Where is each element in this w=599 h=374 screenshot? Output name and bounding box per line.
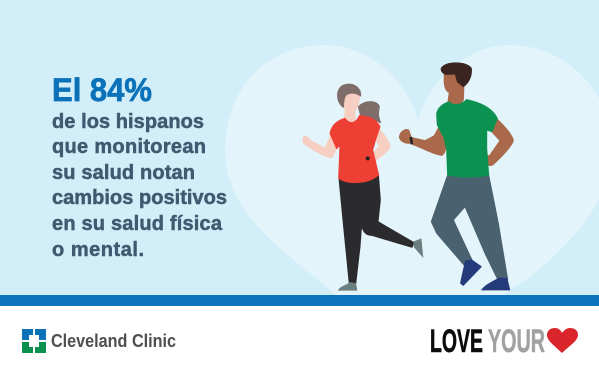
footer panel bbox=[0, 306, 599, 374]
leggings bbox=[339, 174, 414, 284]
ponytail bbox=[358, 102, 381, 123]
body text bbox=[52, 111, 227, 261]
shoes bbox=[460, 259, 482, 286]
watch bbox=[366, 156, 370, 160]
logo: Cleveland Clinic bbox=[22, 329, 176, 353]
logo: Love Your Heart bbox=[430, 323, 578, 359]
shoes bbox=[338, 282, 357, 291]
near arm bbox=[303, 135, 338, 158]
face and neck bbox=[343, 92, 359, 123]
head and neck bbox=[444, 71, 464, 106]
YOUR: YOUR bbox=[488, 323, 545, 359]
wristband bbox=[410, 137, 413, 144]
green shirt bbox=[437, 100, 497, 177]
body text: su salud notan bbox=[52, 162, 195, 184]
icon: red heart bbox=[547, 328, 578, 353]
illustration: man jogging bbox=[399, 63, 513, 290]
body text: que monitorean bbox=[52, 136, 206, 158]
far arm bbox=[358, 127, 390, 165]
body text: en su salud física bbox=[52, 213, 223, 235]
wordmark: Cleveland Clinic bbox=[51, 331, 176, 351]
far arm bbox=[411, 128, 447, 155]
blue divider bar bbox=[0, 295, 599, 306]
near arm bbox=[481, 119, 513, 165]
headline statistic: El 84% bbox=[52, 72, 152, 108]
panel: light blue background bbox=[0, 0, 599, 295]
hair bbox=[441, 63, 471, 87]
trousers bbox=[431, 173, 508, 281]
illustration: woman jogging bbox=[303, 84, 423, 291]
hair bbox=[338, 84, 361, 107]
body text: de los hispanos bbox=[52, 111, 204, 133]
body text: o mental. bbox=[52, 239, 144, 261]
LOVE: LOVE bbox=[430, 323, 483, 359]
body text: cambios positivos bbox=[52, 187, 227, 209]
icon: Cleveland Clinic cross bbox=[22, 329, 46, 353]
fist bbox=[399, 130, 411, 143]
red shirt bbox=[330, 116, 380, 183]
heart backdrop bbox=[225, 45, 599, 295]
